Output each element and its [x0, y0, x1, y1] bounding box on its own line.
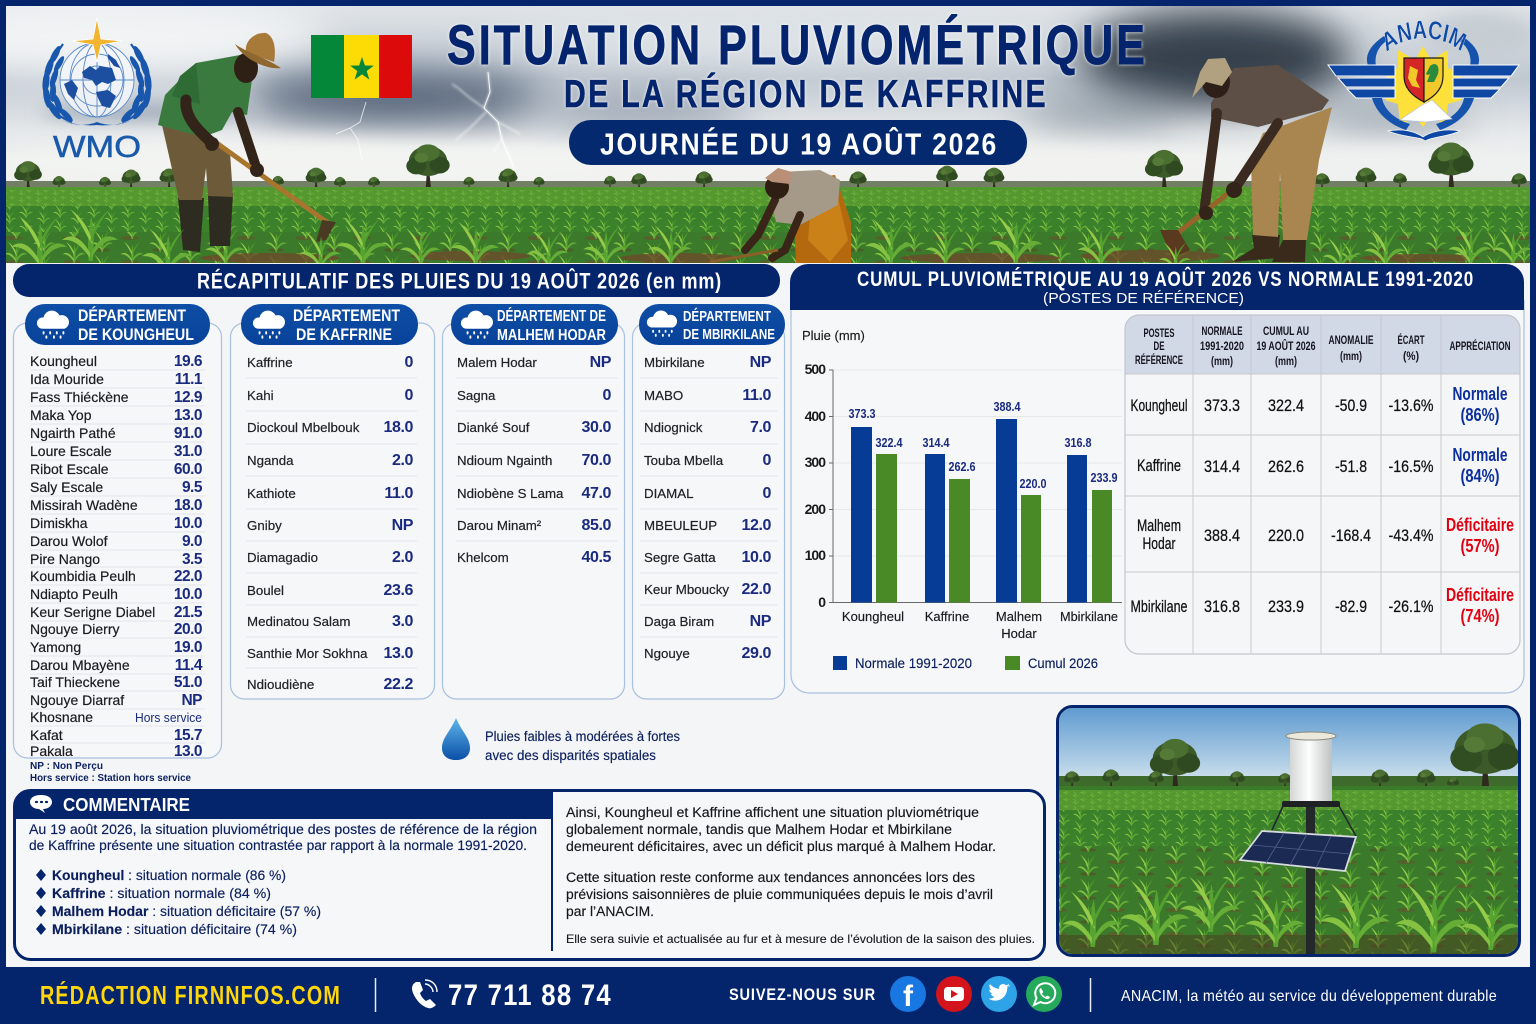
- value labels: 373.3: [848, 406, 876, 421]
- station list: Keur Serigne Diabel: [30, 604, 155, 620]
- icon: facebook: f: [903, 980, 914, 1013]
- row: Mbirkilane: [1130, 585, 1514, 626]
- commentary bullets: Mbirkilane : situation déficitaire (74 %): [52, 922, 297, 937]
- station list: 2.0: [392, 452, 413, 469]
- station list: Ndiognick: [644, 420, 703, 435]
- department header: DÉPARTEMENT DE: [497, 308, 606, 325]
- icon: ANACIM logo: [1327, 20, 1520, 142]
- bar chart: Pluie (mm): [802, 328, 865, 343]
- legend notes: NP : Non Perçu: [30, 760, 103, 772]
- commentary right column: par l’ANACIM.: [566, 904, 654, 919]
- table header: (mm): [1275, 356, 1297, 368]
- station list: Santhie Mor Sokhna: [247, 646, 368, 661]
- row: Kaffrine: 262.6: [1268, 457, 1304, 476]
- footer slogan: ANACIM, la météo au service du développement durable: [1121, 988, 1497, 1005]
- row: Mbirkilane: 316.8: [1204, 597, 1240, 616]
- table header: (mm): [1211, 356, 1233, 368]
- station list: Ribot Escale: [30, 461, 109, 477]
- table header: DE: [1154, 341, 1165, 353]
- station list: Medinatou Salam: [247, 614, 350, 629]
- station list: 13.0: [174, 407, 202, 424]
- station list: Touba Mbella: [644, 453, 724, 468]
- station list: Segre Gatta: [644, 550, 716, 565]
- commentary right column: prévisions saisonnières de pluie communiquées depuis le mois d’avril: [566, 887, 993, 902]
- station list: 0: [762, 485, 772, 502]
- row: Mbirkilane: Déficitaire: [1446, 585, 1514, 605]
- ANACIM arc text: [1384, 20, 1467, 52]
- station list: Ngairth Pathé: [30, 425, 116, 441]
- icon: facebook: [890, 976, 926, 1013]
- series: cumul 2026: [876, 454, 1112, 602]
- station list: 0: [762, 452, 772, 469]
- section heading: cumul: (POSTES DE RÉFÉRENCE): [1043, 290, 1244, 307]
- commentary right column: [566, 805, 1035, 946]
- station list: [644, 354, 772, 662]
- station list: 22.2: [383, 676, 413, 693]
- axis labels: 0: [818, 594, 826, 610]
- station list: Koumbidia Peulh: [30, 568, 136, 584]
- panel: departement de Malhem Hodar: [442, 304, 624, 699]
- footer bar: [0, 967, 1536, 1024]
- value labels: 262.6: [948, 459, 976, 474]
- station list: Ndiapto Peulh: [30, 586, 118, 602]
- station list: Khosnane: [30, 709, 93, 725]
- station list: NP: [392, 517, 414, 534]
- commentary bullets: Kaffrine : situation normale (84 %): [52, 886, 271, 901]
- category labels: Malhem: [996, 609, 1042, 624]
- station list: Pakala: [30, 743, 73, 759]
- row: Koungheul: [1130, 384, 1508, 425]
- department header: [451, 304, 618, 345]
- station list: Koungheul: [30, 353, 97, 369]
- station list: Kafat: [30, 727, 63, 743]
- value labels: [848, 399, 1118, 491]
- shield: [1404, 58, 1443, 102]
- axis labels: 100: [805, 547, 826, 563]
- table header: POSTES: [1144, 328, 1175, 340]
- section heading: cumul: [790, 264, 1524, 310]
- station list: 11.0: [742, 387, 771, 404]
- icon: phone: [412, 980, 437, 1008]
- value labels: 233.9: [1090, 470, 1118, 485]
- station list: Ndioudiène: [247, 677, 314, 692]
- commentary right column: Cette situation reste conforme aux tendances annoncées lors des: [566, 870, 975, 885]
- commentary right column: demeurent déficitaires, avec un déficit plus marqué à Malhem Hodar.: [566, 839, 996, 854]
- department header: DE MBIRKILANE: [683, 326, 775, 343]
- commentary bullets: Koungheul : situation normale (86 %): [52, 868, 286, 883]
- bar chart: [802, 328, 1122, 671]
- station list: Yamong: [30, 639, 81, 655]
- station list: 40.5: [581, 549, 611, 566]
- row: Koungheul: 322.4: [1268, 396, 1304, 415]
- table header: APPRÉCIATION: [1450, 340, 1510, 353]
- station list: 9.0: [182, 533, 202, 550]
- globe emblem: [60, 43, 134, 117]
- icon: twitter: [981, 976, 1017, 1012]
- row: Malhem Hodar: 388.4: [1204, 526, 1240, 545]
- station list: Kaffrine: [247, 355, 293, 370]
- callout: spatial disparities: [442, 718, 680, 763]
- station list: 10.0: [174, 515, 202, 532]
- panel: departement de Koungheul: [14, 304, 222, 760]
- station list: Ndiobène S Lama: [457, 486, 564, 501]
- photo field: [1059, 786, 1520, 956]
- sun: [1384, 46, 1464, 127]
- shield charges: [1426, 64, 1439, 82]
- station list: Sagna: [457, 388, 496, 403]
- row: Malhem Hodar: 220.0: [1268, 526, 1304, 545]
- table header: RÉFÉRENCE: [1135, 354, 1183, 367]
- commentary intro: de Kaffrine présente une situation contrastée par rapport à la normale 1991-2020.: [29, 838, 527, 853]
- row: Malhem Hodar: -43.4%: [1388, 526, 1434, 545]
- category labels: Kaffrine: [925, 609, 969, 624]
- foreground leaves: [142, 229, 1358, 263]
- row: Koungheul: (86%): [1460, 405, 1500, 425]
- chart legend: Normale 1991-2020: [855, 656, 972, 671]
- station list: Missirah Wadène: [30, 497, 138, 513]
- row: Mbirkilane: (74%): [1460, 606, 1500, 626]
- station list: 0: [602, 387, 612, 404]
- station list: 21.5: [174, 604, 203, 621]
- station list: 2.0: [392, 549, 413, 566]
- solar panel: [1240, 831, 1356, 871]
- title line 1: SITUATION PLUVIOMÉTRIQUE: [447, 13, 1148, 76]
- row: Mbirkilane: -26.1%: [1388, 597, 1434, 616]
- row: Koungheul: 373.3: [1204, 396, 1240, 415]
- station list: [457, 354, 612, 566]
- panel: cumul chart and table: [790, 264, 1524, 693]
- crop field: [6, 187, 1532, 268]
- compass star: [72, 18, 122, 62]
- station list: Hors service: [135, 711, 202, 725]
- station list: 11.1: [175, 371, 203, 388]
- row: Koungheul: -50.9: [1335, 396, 1367, 415]
- axis labels: 200: [805, 501, 826, 517]
- station list: 22.0: [741, 581, 771, 598]
- station list: Kathiote: [247, 486, 296, 501]
- row: Malhem Hodar: [1137, 515, 1514, 556]
- department header: [639, 304, 785, 345]
- commentary right column: Ainsi, Koungheul et Kaffrine affichent une situation pluviométrique: [566, 805, 979, 820]
- chart legend: [833, 656, 1098, 671]
- axis labels: 500: [805, 361, 826, 377]
- station list: 19.0: [174, 639, 202, 656]
- row: Kaffrine: Kaffrine: [1137, 456, 1181, 475]
- station list: 12.9: [174, 389, 203, 406]
- category labels: Koungheul: [842, 609, 904, 624]
- row: Kaffrine: -16.5%: [1388, 457, 1434, 476]
- value labels: 388.4: [994, 399, 1021, 414]
- row: Malhem Hodar: (57%): [1460, 536, 1500, 556]
- icon: water drop: [442, 718, 470, 760]
- value labels: 220.0: [1020, 476, 1046, 491]
- station list: 22.0: [174, 568, 202, 585]
- panel: departement de Mbirkilane: [632, 304, 785, 699]
- station list: Diamagadio: [247, 550, 318, 565]
- footer credit: RÉDACTION FIRNNFOS.COM: [40, 980, 341, 1010]
- axis labels: 300: [805, 454, 826, 470]
- station list: Gniby: [247, 518, 282, 533]
- station list: Kahi: [247, 388, 274, 403]
- panel: commentaire: [14, 790, 1044, 960]
- station list: 11.0: [384, 485, 413, 502]
- station list: Dimiskha: [30, 515, 88, 531]
- department header: DE KAFFRINE: [296, 325, 392, 344]
- row: Kaffrine: 314.4: [1204, 457, 1240, 476]
- station list: MBEULEUP: [644, 518, 717, 533]
- row: Malhem Hodar: -168.4: [1331, 526, 1371, 545]
- table header: CUMUL AU: [1263, 326, 1309, 338]
- station list: 10.0: [741, 549, 771, 566]
- station list: 30.0: [581, 419, 611, 436]
- row: Koungheul: -13.6%: [1388, 396, 1434, 415]
- department header: DE KOUNGHEUL: [78, 325, 194, 344]
- panel: departement de Kaffrine: [230, 304, 434, 699]
- department header: DÉPARTEMENT: [293, 306, 401, 325]
- station list: Fass Thiéckène: [30, 389, 129, 405]
- farmer centre woman: [710, 168, 851, 263]
- rain gauge: [1272, 732, 1356, 956]
- station list: MABO: [644, 388, 683, 403]
- row: Kaffrine: (84%): [1460, 466, 1500, 486]
- follow us label: SUIVEZ-NOUS SUR: [729, 985, 876, 1004]
- icon: Senegal flag: [311, 35, 412, 98]
- station list: Taif Thieckene: [30, 674, 120, 690]
- station list: 85.0: [581, 517, 611, 534]
- station list: Pire Nango: [30, 551, 100, 567]
- station list: 10.0: [174, 586, 202, 603]
- department header: DÉPARTEMENT: [683, 308, 771, 325]
- station list: 18.0: [383, 419, 413, 436]
- title: [447, 13, 1148, 165]
- section heading: recapitulatif: [13, 264, 780, 297]
- station list: Diockoul Mbelbouk: [247, 420, 360, 435]
- table header: [1135, 326, 1510, 368]
- station list: Ngouye Dierry: [30, 621, 119, 637]
- ribbon: [1388, 130, 1460, 141]
- open book: [1400, 100, 1452, 122]
- station list: 13.0: [383, 645, 413, 662]
- value labels: 322.4: [876, 435, 903, 450]
- commentary bullets: [36, 868, 321, 937]
- lower laurels: [1372, 98, 1474, 130]
- commentaire heading: [14, 790, 552, 819]
- station list: Boulel: [247, 583, 284, 598]
- station list: 51.0: [174, 674, 202, 691]
- commentary right column: globalement normale, tandis que Malhem Hodar et Mbirkilane: [566, 822, 952, 837]
- station list: [247, 354, 414, 693]
- legend notes: Hors service : Station hors service: [30, 772, 191, 784]
- ANACIM arc text: ANACIM: [1384, 20, 1467, 52]
- station list: 60.0: [174, 461, 202, 478]
- station list: 19.6: [174, 353, 203, 370]
- callout: spatial disparities: avec des disparités spatiales: [485, 748, 656, 763]
- photo: rain gauge in field: [1058, 706, 1520, 956]
- section heading: recapitulatif: RÉCAPITULATIF DES PLUIES DU 19 AOÛT 2026 (en mm): [197, 268, 722, 294]
- commentary intro: Au 19 août 2026, la situation pluviométrique des postes de référence de la région: [29, 822, 537, 837]
- table header: 1991-2020: [1200, 341, 1244, 353]
- laurel branches: [41, 44, 153, 125]
- station list: NP: [750, 613, 772, 630]
- callout: spatial disparities: Pluies faibles à modérées à fortes: [485, 729, 680, 744]
- station list: Darou Mbayène: [30, 657, 130, 673]
- station list: Khelcom: [457, 550, 509, 565]
- station list: 29.0: [741, 645, 771, 662]
- station list: Ida Mouride: [30, 371, 104, 387]
- station list: 11.4: [175, 657, 203, 674]
- table header: 19 AOÛT 2026: [1256, 340, 1316, 353]
- axis labels: 400: [805, 408, 826, 424]
- table header: ANOMALIE: [1328, 335, 1374, 347]
- commentary intro: [29, 822, 537, 853]
- station list: 9.5: [182, 479, 203, 496]
- station list: Ndioum Ngainth: [457, 453, 552, 468]
- photo sky: [1059, 708, 1518, 776]
- category labels: Mbirkilane: [1060, 609, 1118, 624]
- station list: 3.0: [392, 613, 413, 630]
- row: Malhem Hodar: Hodar: [1142, 534, 1176, 553]
- department header: MALHEM HODAR: [497, 327, 606, 344]
- row: Malhem Hodar: Malhem: [1137, 516, 1181, 535]
- station list: Mbirkilane: [644, 355, 705, 370]
- icon: speech bubble: [30, 795, 52, 813]
- commentaire heading: COMMENTAIRE: [63, 795, 190, 815]
- continents: [64, 54, 120, 108]
- station list: 23.6: [383, 582, 413, 599]
- farmer left with hoe: [158, 33, 336, 252]
- wings: [1328, 65, 1519, 98]
- row: Mbirkilane: Mbirkilane: [1130, 597, 1188, 616]
- value labels: 314.4: [922, 435, 950, 450]
- date pill: JOURNÉE DU 19 AOÛT 2026: [600, 126, 998, 162]
- station list: NP: [590, 354, 612, 371]
- row: Kaffrine: Normale: [1452, 445, 1508, 465]
- row: Kaffrine: -51.8: [1335, 457, 1367, 476]
- horizon tree line: [6, 142, 1530, 191]
- station list: Loure Escale: [30, 443, 112, 459]
- station list: Ngouye: [644, 646, 690, 661]
- sky with storm clouds: [6, 6, 1530, 155]
- department header: DÉPARTEMENT: [78, 306, 187, 325]
- row: Koungheul: Koungheul: [1130, 396, 1188, 415]
- table header: (mm): [1340, 351, 1362, 363]
- station list: 7.0: [750, 419, 771, 436]
- station list: NP: [750, 354, 772, 371]
- station list: DIAMAL: [644, 486, 694, 501]
- station list: Nganda: [247, 453, 294, 468]
- series: normale 1991-2020: [851, 419, 1087, 602]
- icon: WMO logo: [41, 18, 153, 164]
- station list: Darou Wolof: [30, 533, 108, 549]
- station list: Darou Minam²: [457, 518, 542, 533]
- station list: 15.7: [174, 727, 202, 744]
- photo distant trees: [1059, 723, 1518, 786]
- row: Koungheul: Normale: [1452, 384, 1508, 404]
- station list: 3.5: [182, 551, 203, 568]
- station list: Dianké Souf: [457, 420, 530, 435]
- station list: Daga Biram: [644, 614, 714, 629]
- commentary bullets: Malhem Hodar : situation déficitaire (57 %): [52, 904, 321, 919]
- station list: 47.0: [581, 485, 611, 502]
- category labels: Hodar: [1001, 626, 1037, 641]
- station list: Saly Escale: [30, 479, 103, 495]
- station list: 20.0: [174, 621, 202, 638]
- table header: (%): [1403, 351, 1419, 363]
- station list: Keur Mboucky: [644, 582, 729, 597]
- legend notes: [30, 760, 191, 784]
- station list: 91.0: [174, 425, 202, 442]
- station list: 0: [404, 387, 414, 404]
- station list: 70.0: [581, 452, 611, 469]
- station list: NP: [181, 692, 202, 709]
- station list: Ngouye Diarraf: [30, 692, 124, 708]
- value labels: 316.8: [1064, 435, 1092, 450]
- lightning bolts: [336, 72, 520, 168]
- header banner: [0, 0, 1536, 275]
- phone number: 77 711 88 74: [448, 979, 612, 1012]
- table header: NORMALE: [1202, 326, 1243, 338]
- data table: [1125, 315, 1520, 654]
- farmer right with hoe: [1160, 58, 1332, 262]
- department header: [241, 304, 418, 345]
- icon: whatsapp: [1026, 976, 1062, 1012]
- department header: [25, 304, 210, 345]
- upper laurels: [1367, 36, 1479, 66]
- row: Mbirkilane: -82.9: [1335, 597, 1367, 616]
- station list: 31.0: [174, 443, 202, 460]
- WMO wordmark: WMO: [53, 129, 141, 164]
- axis labels: [805, 361, 826, 610]
- station list: Malem Hodar: [457, 355, 537, 370]
- icon: youtube: [936, 976, 972, 1012]
- station list: 0: [404, 354, 414, 371]
- date pill: [569, 120, 1027, 165]
- station list: [30, 353, 203, 760]
- commentary right column: Elle sera suivie et actualisée au fur et à mesure de l’évolution de la saison des pluies.: [566, 932, 1035, 946]
- title line 2: DE LA RÉGION DE KAFFRINE: [564, 72, 1048, 116]
- station list: 13.0: [174, 743, 202, 760]
- row: Kaffrine: [1137, 445, 1508, 486]
- category labels: [842, 609, 1118, 641]
- row: Malhem Hodar: Déficitaire: [1446, 515, 1514, 535]
- table header: ÉCART: [1398, 334, 1424, 347]
- chart legend: Cumul 2026: [1028, 656, 1098, 671]
- station list: 18.0: [174, 497, 202, 514]
- row: Mbirkilane: 233.9: [1268, 597, 1304, 616]
- station list: Maka Yop: [30, 407, 92, 423]
- station list: 12.0: [741, 517, 771, 534]
